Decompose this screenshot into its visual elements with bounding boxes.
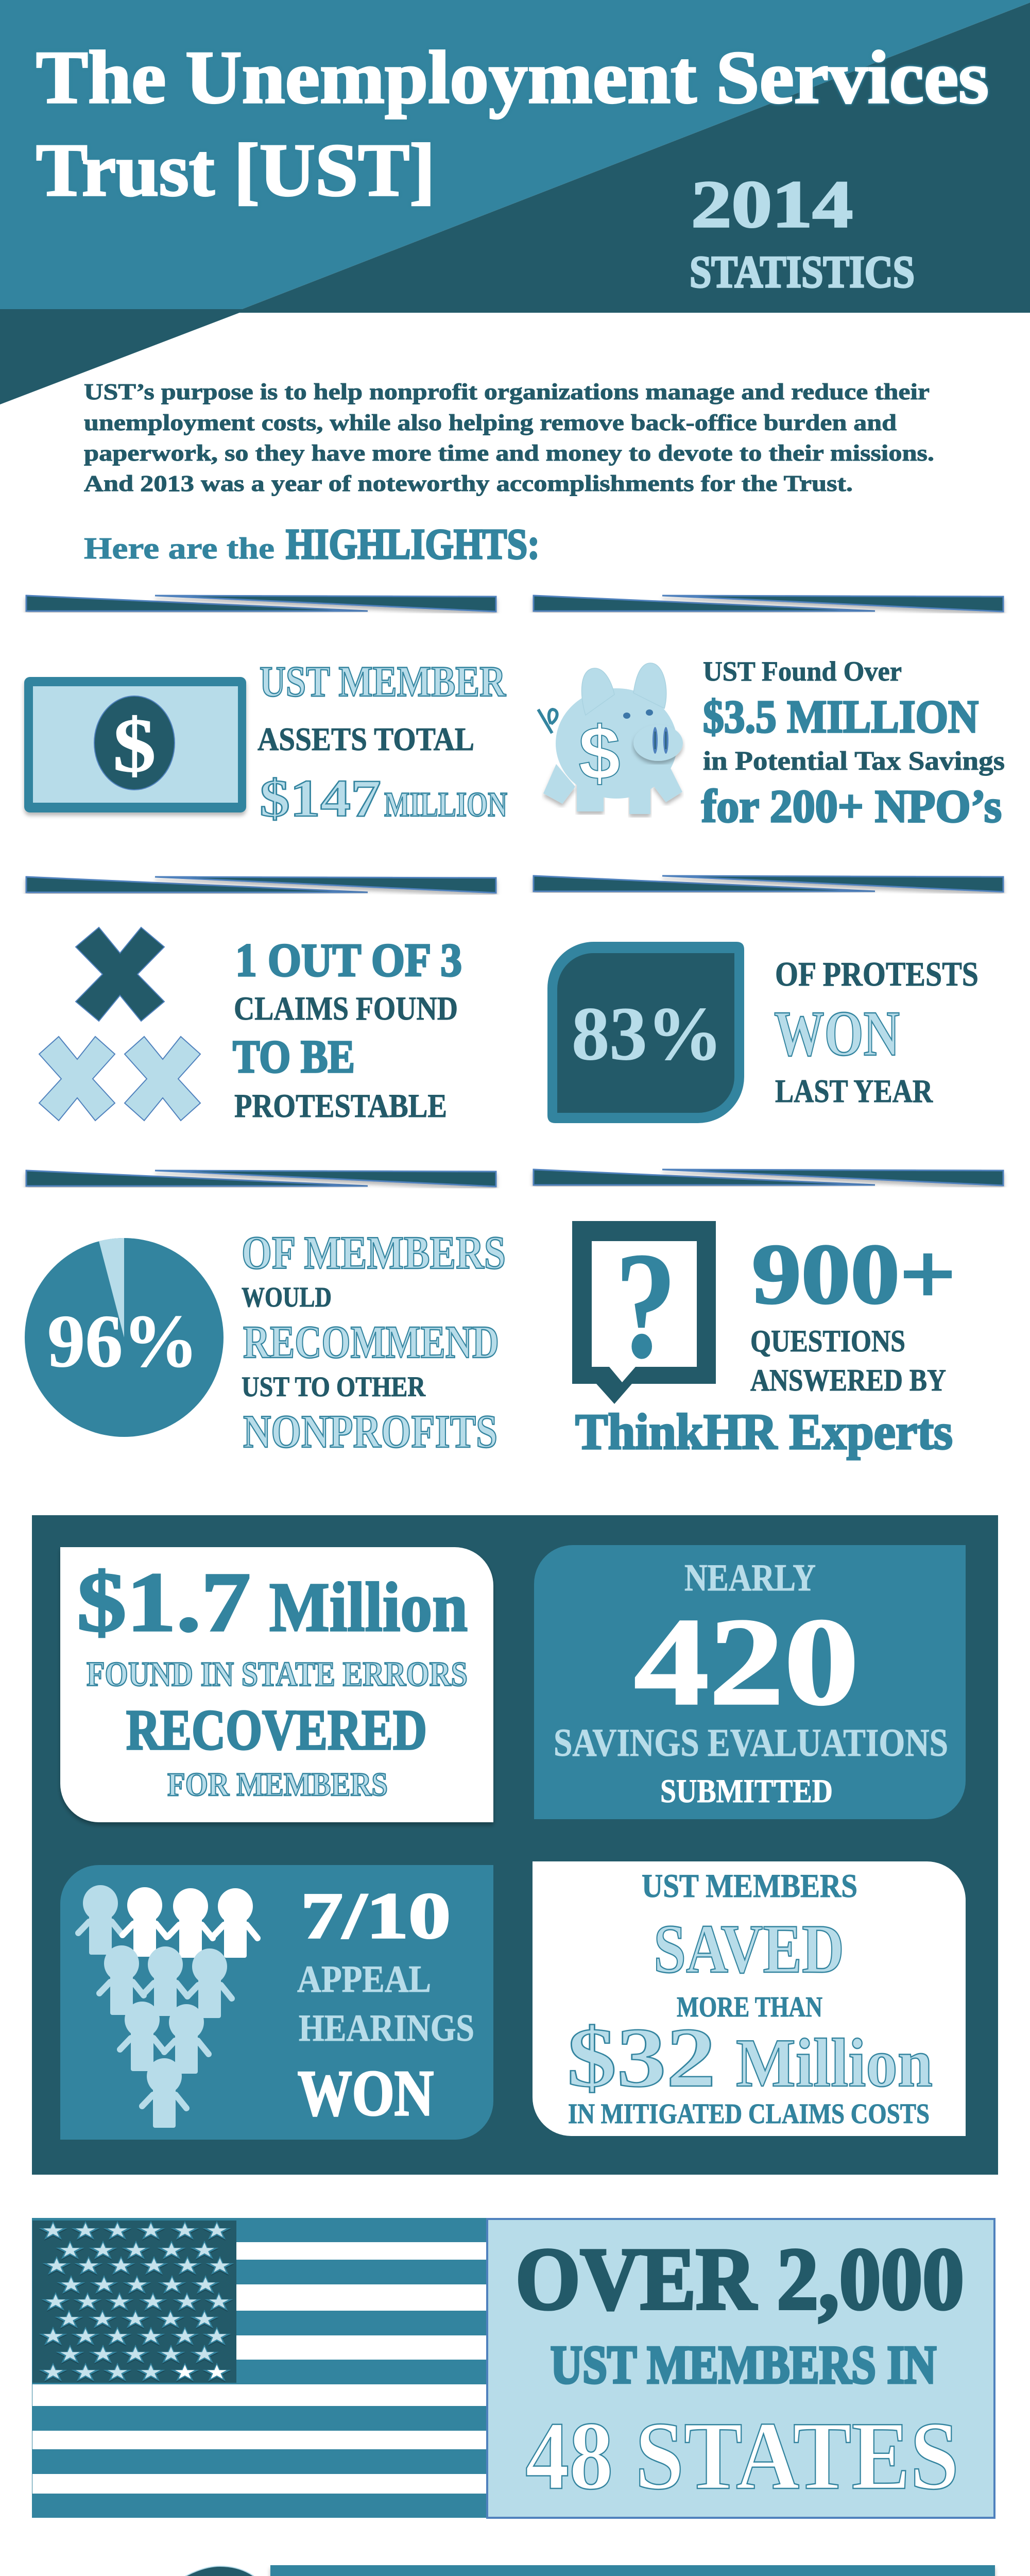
stat text: RECOMMEND <box>243 1317 499 1368</box>
card: appeal hearings: WON <box>298 2058 434 2129</box>
card: state errors recovered: FOUND IN STATE ERRORS <box>87 1654 468 1693</box>
icon: question speech bubble: ? <box>615 1221 677 1390</box>
icon: dollar bill <box>24 677 246 812</box>
card: appeal hearings: 7/10 <box>301 1880 451 1952</box>
header light triangle <box>0 0 1030 309</box>
card: mitigated claims <box>533 1861 966 2136</box>
intro paragraph: UST’s purpose is to help nonprofit organizations manage and reduce their <box>84 379 930 404</box>
stat text: $147 <box>260 769 381 828</box>
pie chart 96 percent <box>25 1238 224 1437</box>
title: The Unemployment Services <box>36 36 989 119</box>
stat text <box>701 656 1005 832</box>
stat text: CLAIMS FOUND <box>234 990 458 1027</box>
icon: piggy bank: $ <box>578 711 621 795</box>
stat text: 1 OUT OF 3 <box>235 934 462 986</box>
panel: member count: 48 STATES <box>525 2402 959 2510</box>
card: savings evaluations: 420 <box>634 1592 859 1731</box>
stat: tax savings <box>538 656 1005 832</box>
stat text: OF MEMBERS <box>242 1227 506 1279</box>
card: savings evaluations: SAVINGS EVALUATIONS <box>554 1721 948 1765</box>
card: mitigated claims: MORE THAN <box>677 1991 822 2023</box>
stat: claims protestable <box>39 927 462 1125</box>
panel: member count: UST MEMBERS IN <box>551 2334 936 2395</box>
stat: members recommend <box>25 1227 506 1458</box>
card: mitigated claims: IN MITIGATED CLAIMS COSTS <box>568 2098 930 2129</box>
stat text: WON <box>774 998 900 1070</box>
stat text <box>242 1227 506 1458</box>
panel: member count <box>487 2219 994 2518</box>
stat text: in Potential Tax Savings <box>703 747 1005 776</box>
intro paragraph <box>84 379 934 496</box>
pig face <box>623 709 668 754</box>
card: appeal hearings: HEARINGS <box>299 2007 474 2049</box>
stat text: NONPROFITS <box>243 1405 497 1458</box>
badge: 83 percent: 83% <box>572 992 723 1076</box>
card: state errors recovered: RECOVERED <box>126 1699 427 1762</box>
card: savings evaluations: SUBMITTED <box>660 1773 833 1810</box>
card: savings evaluations: NEARLY <box>684 1557 816 1599</box>
stat text: OF PROTESTS <box>775 955 978 993</box>
stat text: UST MEMBER <box>260 657 506 706</box>
icon: question speech bubble <box>572 1221 716 1404</box>
panel: key results <box>32 1515 998 2175</box>
year: 2014 <box>691 167 853 242</box>
stat: protests won <box>547 942 978 1123</box>
icon: three X marks <box>39 927 200 1121</box>
stat text <box>258 657 507 828</box>
card: state errors recovered: Million <box>269 1569 468 1646</box>
stat text: UST TO OTHER <box>242 1371 426 1402</box>
stat text: ThinkHR Experts <box>575 1404 953 1460</box>
panel: partner list <box>270 2565 995 2576</box>
flag stars <box>39 2221 234 2382</box>
pig tail <box>538 709 557 733</box>
dividers row 1 <box>26 596 1003 612</box>
icon: paper-chain people <box>78 1885 258 2128</box>
statistics label: STATISTICS <box>690 247 915 297</box>
card: mitigated claims: UST MEMBERS <box>642 1868 857 1905</box>
stat text: MILLION <box>384 785 507 824</box>
pie chart 96 percent: 96% <box>47 1299 198 1383</box>
intro paragraph: paperwork, so they have more time and money to devote to their missions. <box>84 440 934 466</box>
dividers row 3 <box>26 1170 1003 1187</box>
pig body <box>543 663 683 814</box>
stat text: WOULD <box>242 1281 332 1313</box>
ribbon: nine <box>32 2566 270 2576</box>
title <box>36 36 989 212</box>
intro paragraph: And 2013 was a year of noteworthy accomplishments for the Trust. <box>84 471 853 496</box>
stat text <box>233 934 462 1125</box>
stat text: ASSETS TOTAL <box>258 721 474 757</box>
stat text: UST Found Over <box>703 656 902 687</box>
card: mitigated claims: SAVED <box>654 1911 844 1988</box>
stat text: ANSWERED BY <box>750 1363 946 1397</box>
highlights heading <box>84 520 540 568</box>
stat text: PROTESTABLE <box>234 1088 447 1125</box>
stat text: $3.5 MILLION <box>703 691 978 742</box>
stat text: QUESTIONS <box>750 1324 905 1358</box>
icon: dollar bill: $ <box>113 703 156 788</box>
panel: member count: OVER 2,000 <box>516 2230 964 2328</box>
header dark band <box>0 3 1030 404</box>
card: state errors recovered: FOR MEMBERS <box>167 1766 388 1803</box>
stat: thinkhr questions <box>572 1221 956 1460</box>
card: appeal hearings: APPEAL <box>297 1958 431 2001</box>
card: appeal hearings <box>60 1865 493 2140</box>
title: Trust [UST] <box>36 128 435 212</box>
stat text: TO BE <box>233 1031 355 1082</box>
stat text: LAST YEAR <box>775 1073 933 1109</box>
card: state errors recovered: $1.7 <box>77 1555 251 1649</box>
icon: american flag <box>32 2218 487 2518</box>
card: savings evaluations <box>534 1545 966 1819</box>
intro paragraph: unemployment costs, while also helping remove back-office burden and <box>84 410 897 435</box>
highlights heading: HIGHLIGHTS: <box>286 520 540 568</box>
stat text: for 200+ NPO’s <box>701 781 1002 832</box>
card: mitigated claims: Million <box>736 2025 933 2101</box>
affinity partners <box>32 2565 995 2576</box>
card: mitigated claims: $32 <box>567 2010 716 2105</box>
stat: member assets <box>24 657 507 828</box>
header banner <box>0 0 1030 404</box>
stat text: 900+ <box>752 1227 956 1322</box>
stat text <box>774 955 978 1109</box>
highlights heading: Here are the <box>84 531 274 565</box>
badge: 83 percent <box>547 942 744 1123</box>
stat text <box>575 1227 956 1460</box>
icon: piggy bank <box>538 663 683 814</box>
dividers row 2 <box>26 876 1003 893</box>
flag and member count <box>32 2218 994 2518</box>
card: state errors recovered <box>60 1547 493 1822</box>
